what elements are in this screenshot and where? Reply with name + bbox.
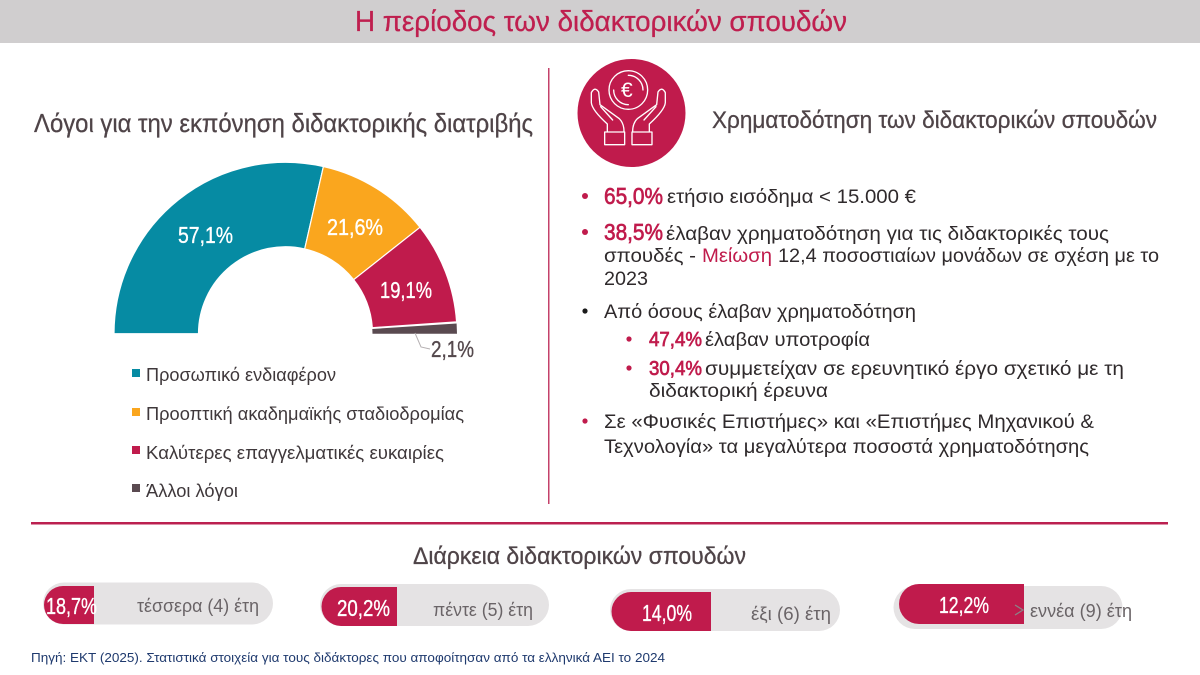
legend: Άλλοι λόγοι — [146, 481, 238, 501]
heading: duration: Διάρκεια διδακτορικών σπουδών — [413, 543, 746, 570]
pill: four years: 18,7% — [46, 593, 97, 619]
pill: four years — [43, 582, 273, 624]
vertical divider — [548, 68, 550, 504]
legend — [132, 365, 464, 501]
pill: nine years — [894, 584, 1132, 629]
text block: funding bullets: 30,4% — [649, 357, 702, 380]
text block: funding bullets: 47,4% — [649, 328, 702, 351]
icon: hands holding euro coin — [578, 59, 686, 167]
legend: Προοπτική ακαδημαϊκής σταδιοδρομίας — [146, 404, 464, 424]
semicircle chart: 2,1% — [431, 336, 474, 362]
pill: five years — [320, 584, 549, 626]
header band with title — [0, 0, 1200, 43]
pill: six years — [610, 589, 840, 631]
source note: Πηγή: ΕΚΤ (2025). Στατιστικά στοιχεία για τους διδάκτορες που αποφοίτησαν από τα ελληνικά ΑΕΙ το 2024 — [31, 651, 665, 665]
text block: funding bullets: 2023 — [604, 268, 648, 290]
text block: funding bullets: ετήσιο εισόδημα < 15.000 € — [667, 186, 916, 208]
text block: funding bullets: διδακτορική έρευνα — [649, 380, 828, 402]
pill: four years: τέσσερα (4) έτη — [137, 595, 259, 616]
text block: funding bullets — [582, 183, 1159, 458]
text block: funding bullets: έλαβαν υποτροφία — [705, 329, 870, 351]
text block: funding bullets: Τεχνολογία» τα μεγαλύτερα ποσοστά χρηματοδότησης — [604, 436, 1089, 458]
pill: five years: πέντε (5) έτη — [433, 599, 533, 620]
header band with title: Η περίοδος των διδακτορικών σπουδών — [355, 6, 847, 38]
pill: six years: έξι (6) έτη — [751, 603, 831, 624]
horizontal divider — [31, 522, 1168, 524]
text block: funding bullets: Από όσους έλαβαν χρηματοδότηση — [604, 301, 916, 323]
pill: nine years: εννέα (9) έτη — [1030, 600, 1132, 621]
text block: funding bullets: 38,5% — [604, 219, 663, 245]
semicircle chart: 21,6% — [327, 214, 383, 240]
heading: funding: Χρηματοδότηση των διδακτορικών σπουδών — [712, 107, 1157, 134]
text block: funding bullets: συμμετείχαν σε ερευνητικό έργο σχετικό με τη — [705, 358, 1124, 380]
text block: funding bullets: 65,0% — [604, 183, 663, 209]
pill: six years: 14,0% — [642, 600, 692, 626]
panel: reasons for doctoral dissertation — [34, 108, 533, 501]
legend: Προσωπικό ενδιαφέρον — [146, 365, 336, 385]
text block: funding bullets: Μείωση — [702, 245, 772, 267]
icon: hands holding euro coin: € — [621, 79, 633, 102]
pill: five years: 20,2% — [337, 595, 390, 621]
pill: nine years: 12,2% — [939, 592, 989, 618]
heading: reasons: Λόγοι για την εκπόνηση διδακτορικής διατριβής — [34, 108, 533, 138]
text block: funding bullets: έλαβαν χρηματοδότηση για τις διδακτορικές τους — [666, 223, 1109, 245]
legend: Καλύτερες επαγγελματικές ευκαιρίες — [146, 443, 444, 463]
text block: funding bullets: Σε «Φυσικές Επιστήμες» και «Επιστήμες Μηχανικού & — [604, 411, 1094, 433]
semicircle chart: 19,1% — [380, 277, 432, 303]
semicircle chart — [114, 162, 474, 362]
text block: funding bullets: σπουδές - — [604, 245, 696, 267]
semicircle chart: 57,1% — [178, 222, 233, 248]
text block: funding bullets: 12,4 ποσοστιαίων μονάδων σε σχέση με το — [778, 245, 1159, 267]
